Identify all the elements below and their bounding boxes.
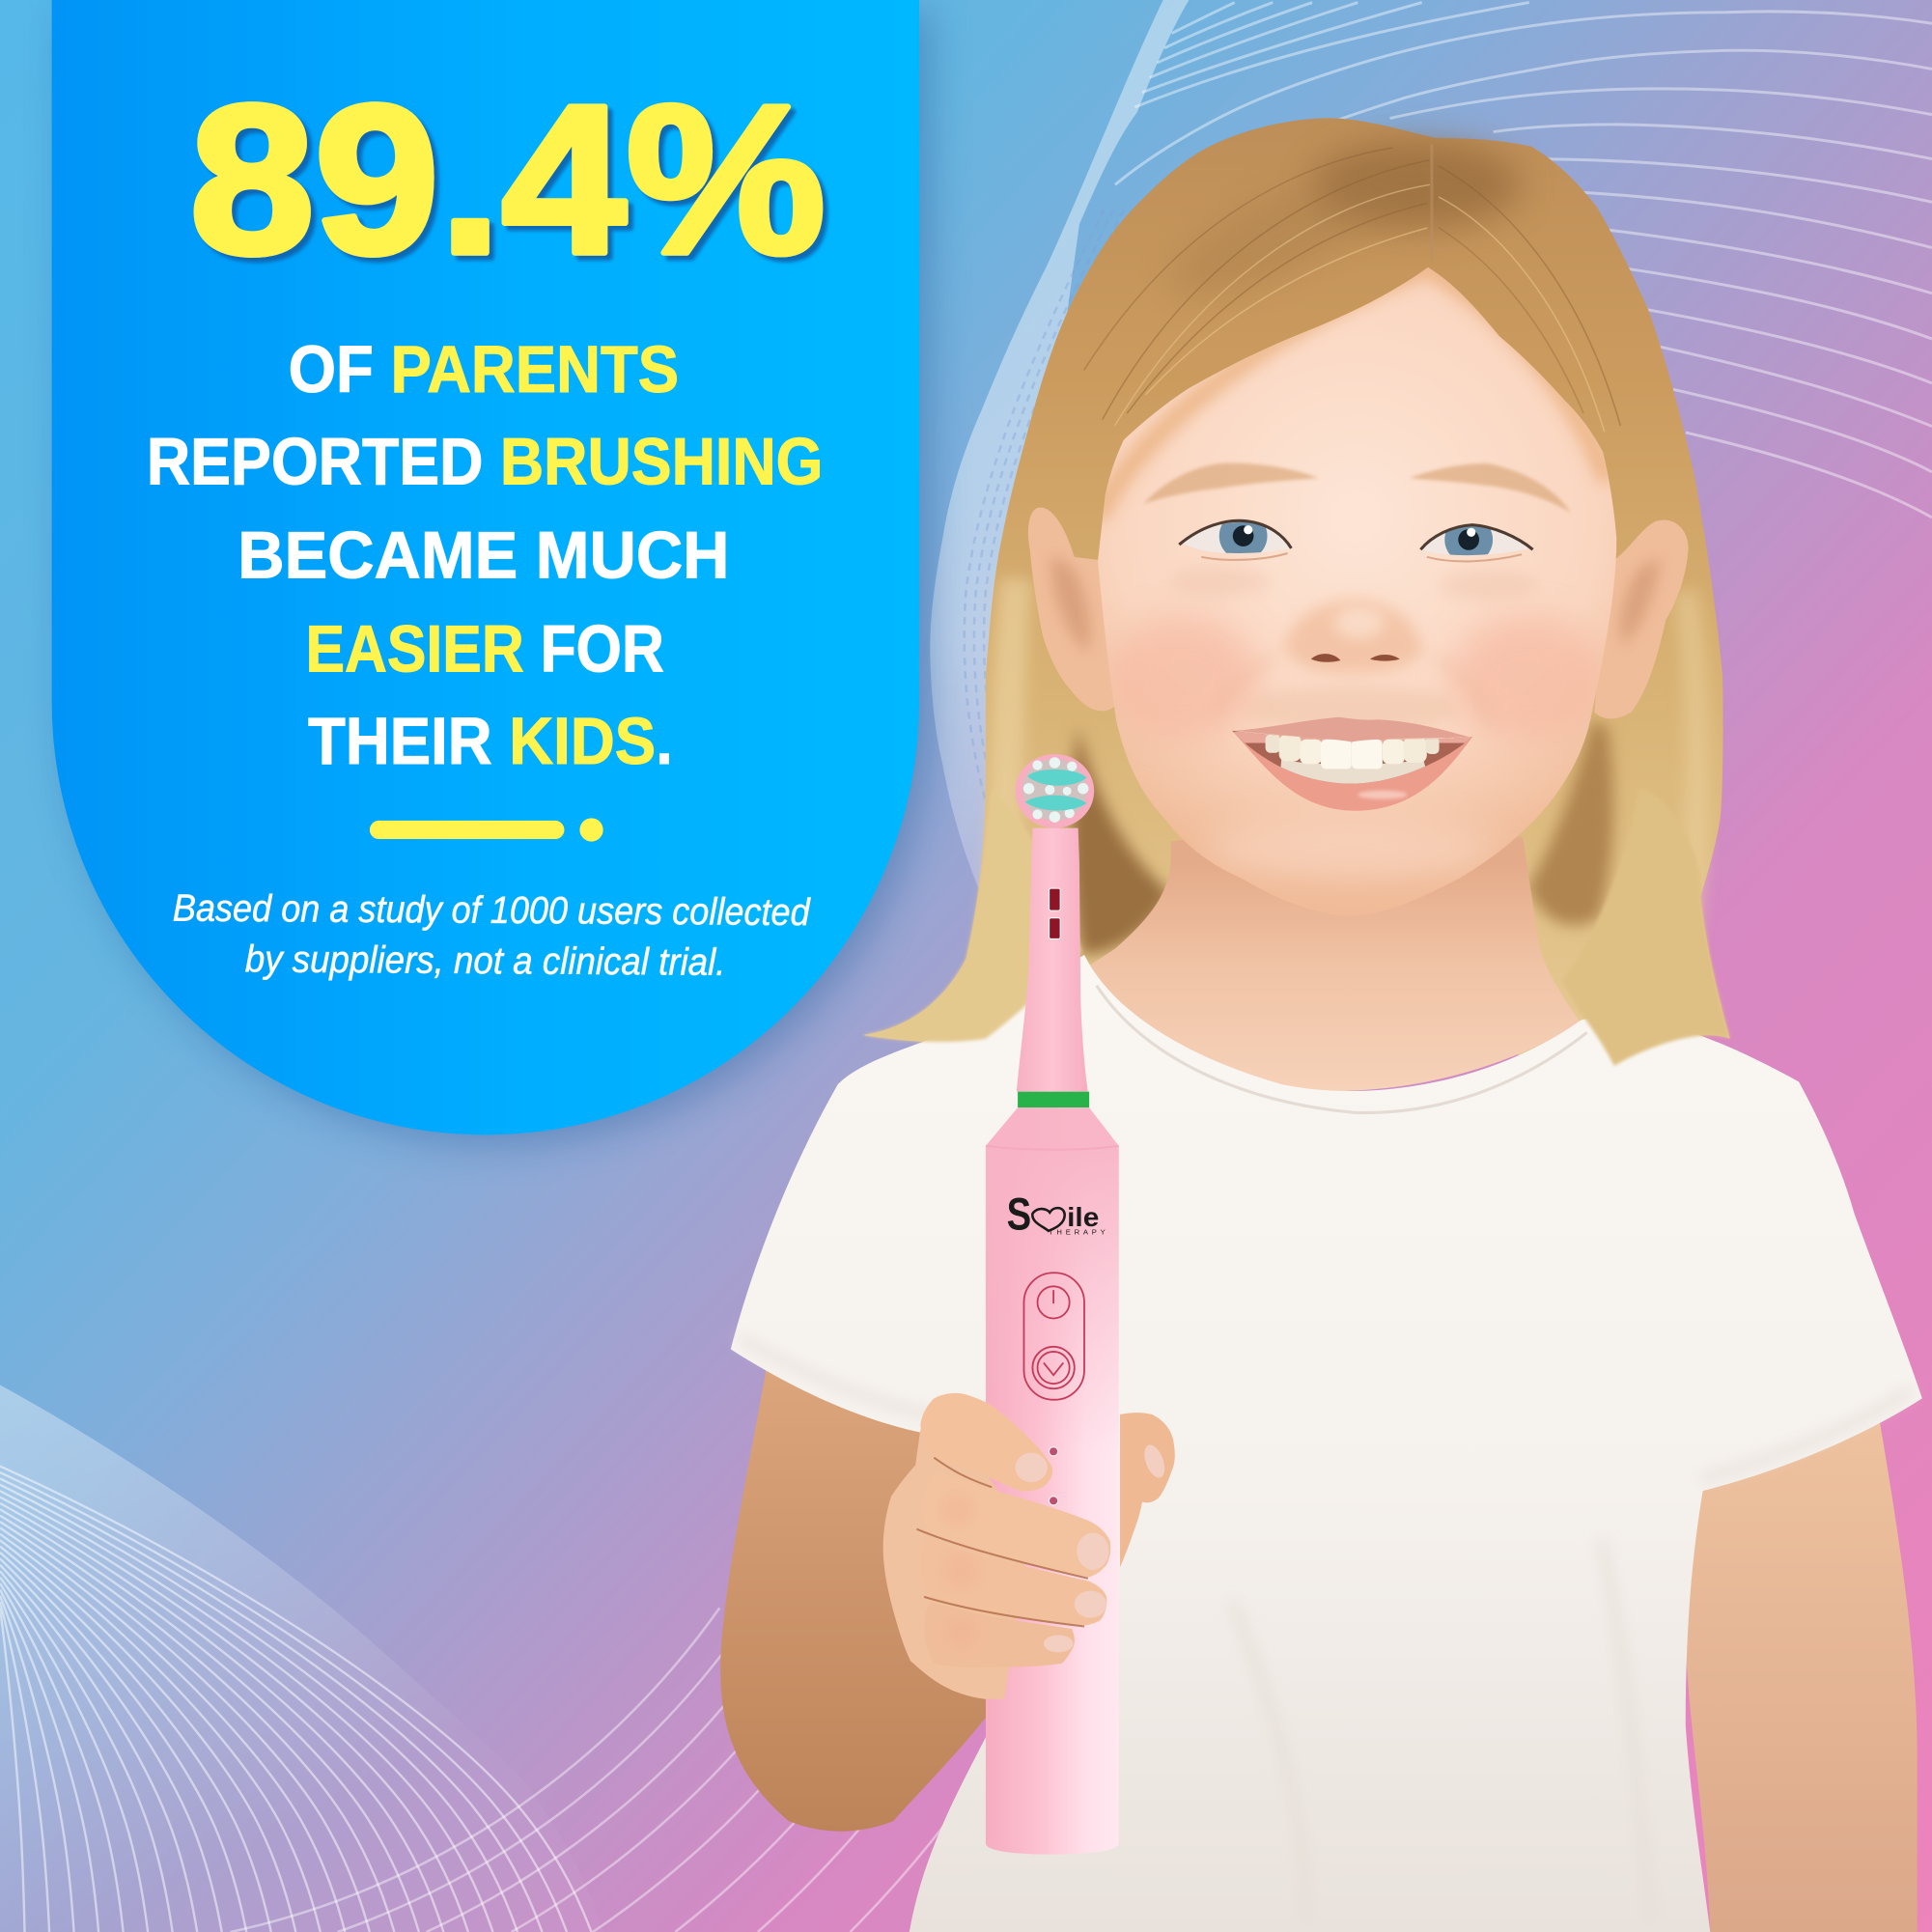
photo: smiling girl holding toothbrush (720, 118, 1922, 1932)
ring finger (924, 1602, 1075, 1667)
shirt collar seam (1097, 986, 1587, 1113)
hair (862, 118, 1730, 1066)
logo: Smile Therapy: S (1007, 1190, 1031, 1241)
thumb (920, 1393, 1052, 1492)
nose (1284, 599, 1423, 673)
neck (1087, 813, 1581, 1091)
finger creases (916, 1458, 1088, 1627)
logo: Smile Therapy: THERAPY (1049, 1228, 1106, 1237)
panel: blue statistic card (52, 0, 919, 1134)
eye right (1419, 523, 1533, 562)
background: bottom-left swoosh and wave lines (0, 1385, 942, 1932)
toothbrush handle (986, 1107, 1119, 1855)
knuckle blush (940, 1492, 978, 1647)
toothbrush vents (1050, 888, 1060, 938)
hair strands (1084, 146, 1620, 432)
arm: viewer left (720, 1368, 998, 1832)
teeth (1232, 732, 1472, 789)
hair front locks over shoulders (862, 789, 1730, 1066)
toothbrush bristles (1022, 757, 1088, 823)
text block: parents statement: EASIER FOR (305, 612, 664, 686)
heading: 89.4%: 89.4% (190, 61, 826, 298)
text block: parents statement (147, 332, 823, 778)
control buttons (1023, 1273, 1084, 1400)
lower lip (1232, 731, 1472, 811)
upper lip (1236, 717, 1469, 742)
far fingertip (1120, 1413, 1175, 1567)
divider: yellow bar and dot (370, 818, 603, 842)
arm: viewer right (1686, 1417, 1918, 1932)
text block: study footnote: Based on a study of 1000 users collected (173, 887, 812, 934)
panel shadow (64, 10, 932, 1145)
lip highlight (1358, 791, 1407, 799)
toothbrush neck (1017, 828, 1088, 1092)
face shading (1098, 267, 1608, 880)
middle finger (920, 1535, 1106, 1626)
text block: parents statement: OF PARENTS (289, 332, 679, 406)
toothbrush head (1016, 754, 1094, 828)
eye left (1178, 519, 1293, 561)
text block: parents statement: THEIR KIDS. (308, 704, 673, 778)
mouth: smile (1232, 717, 1472, 811)
face (1098, 267, 1616, 915)
handle top tint (986, 1107, 1119, 1454)
hand holding toothbrush (883, 1393, 1175, 1699)
palm (883, 1429, 1029, 1699)
hair shading: crown and lower darker locks (992, 140, 1697, 986)
text block: parents statement: REPORTED BRUSHING (147, 425, 823, 499)
indicator lights (1050, 1447, 1058, 1505)
index finger (922, 1472, 1110, 1577)
ear left (1028, 508, 1115, 711)
eyebrow right (1410, 463, 1571, 513)
ear right (1594, 519, 1689, 718)
text block: study footnote (172, 887, 812, 985)
finger nails (1016, 1442, 1168, 1652)
text block: study footnote: by suppliers, not a clinical trial. (245, 938, 726, 984)
t-shirt (731, 955, 1922, 1932)
shirt folds (740, 1337, 1913, 1922)
eyebrow left (1143, 463, 1318, 504)
background: top-right swoosh and line arcs (930, 0, 1932, 906)
electric toothbrush (986, 754, 1119, 1855)
mouth interior (1232, 731, 1472, 784)
logo: Smile Therapy (1007, 1190, 1106, 1241)
text block: parents statement: BECAME MUCH (238, 518, 729, 593)
toothbrush green band (1018, 1092, 1089, 1107)
logo: Smile Therapy: ile (1067, 1202, 1099, 1232)
